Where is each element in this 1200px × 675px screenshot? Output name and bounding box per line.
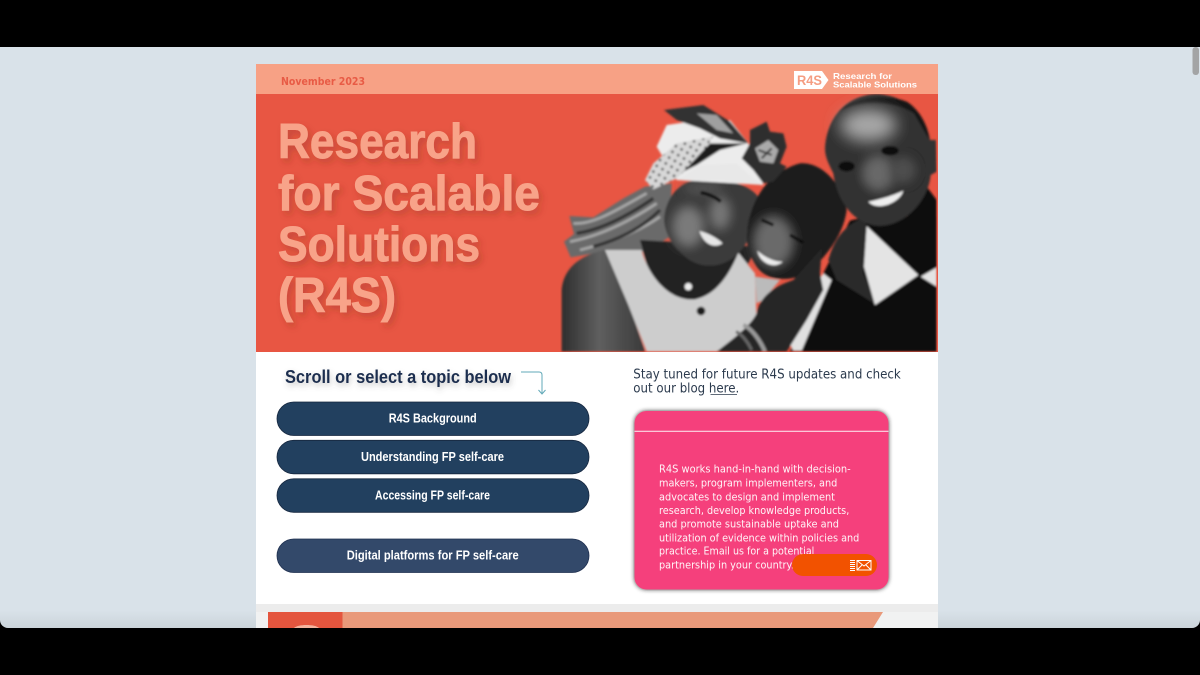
hair — [564, 183, 672, 257]
blog note — [633, 367, 901, 397]
photo: three smiling people in black and white — [562, 94, 937, 352]
headband — [677, 163, 763, 185]
dark stripe — [683, 143, 747, 172]
R4S logo: R4S — [797, 73, 822, 88]
card text: utilization of evidence within policies and — [659, 532, 859, 544]
necklace pendant and button — [685, 283, 692, 290]
button: Accessing FP self-care — [277, 479, 589, 512]
heading: scroll or select: Scroll or select a topic below — [285, 367, 512, 387]
email button — [792, 554, 877, 576]
button: Understanding FP self-care — [277, 440, 589, 474]
page sheet — [256, 352, 938, 604]
button: Digital platforms for FP self-care — [277, 539, 589, 572]
next section band — [256, 604, 938, 628]
button: Understanding FP self-care: Understanding FP self-care — [361, 450, 504, 464]
card text: and promote sustainable uptake and — [659, 519, 839, 531]
title — [278, 115, 540, 323]
button: Accessing FP self-care: Accessing FP self-care — [375, 488, 490, 502]
section icon tile — [268, 612, 342, 628]
scrollbar — [1192, 47, 1199, 75]
right person's collar — [864, 226, 937, 305]
blog note: out our blog here. — [633, 382, 739, 397]
card text: R4S works hand-in-hand with decision- — [659, 464, 851, 476]
date: November 2023 — [281, 76, 365, 88]
arrow pointing to the topics — [521, 372, 546, 394]
woman's face — [664, 179, 760, 266]
hero panel — [256, 94, 938, 352]
dress — [605, 250, 757, 352]
neck and chest — [640, 240, 757, 305]
woman's shoulder — [562, 250, 645, 352]
headwrap — [645, 105, 787, 189]
button: Digital platforms for FP self-care: Digital platforms for FP self-care — [347, 548, 519, 562]
card text: makers, program implementers, and — [659, 477, 837, 489]
dotted band — [645, 137, 713, 189]
bow — [742, 122, 787, 183]
button: R4S Background — [277, 402, 589, 436]
topic buttons — [277, 402, 589, 572]
card text: research, develop knowledge products, — [659, 505, 849, 517]
right person's head — [825, 94, 937, 276]
child's head — [747, 163, 847, 279]
pink partnership card — [634, 411, 888, 590]
R4S logo: Research for — [833, 71, 893, 81]
title: Research — [278, 115, 477, 169]
title: (R4S) — [278, 269, 396, 323]
header band — [256, 64, 938, 94]
right person's dark shirt — [790, 217, 937, 352]
card text — [659, 464, 859, 571]
card text: partnership in your country. — [659, 559, 794, 571]
button: R4S Background: R4S Background — [389, 412, 477, 426]
child's hand and bracelets — [717, 248, 823, 352]
top knot — [664, 105, 748, 143]
title: for Scalable — [278, 167, 540, 221]
card text: practice. Email us for a potential — [659, 546, 814, 558]
child's white shirt — [784, 273, 832, 351]
title: Solutions — [278, 218, 480, 272]
blog note: Stay tuned for future R4S updates and check — [633, 367, 901, 382]
card text: advocates to design and implement — [659, 491, 835, 503]
R4S logo — [794, 71, 917, 90]
section ribbon — [342, 612, 883, 628]
R4S logo: Scalable Solutions — [833, 80, 917, 90]
icon: envelope — [850, 560, 871, 570]
white cap — [657, 120, 763, 185]
child's neck — [755, 277, 780, 303]
